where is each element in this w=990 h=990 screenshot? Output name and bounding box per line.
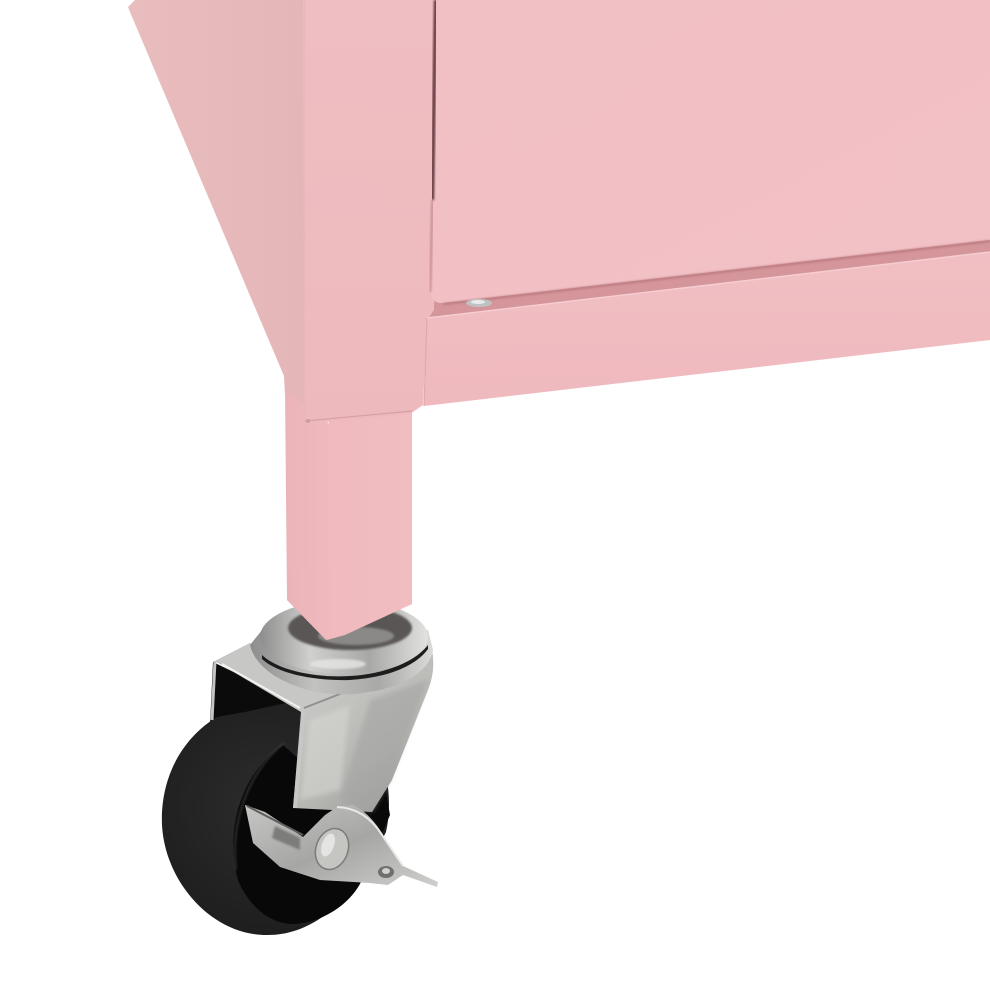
stem socket bbox=[288, 606, 412, 650]
swivel fork body bbox=[215, 643, 433, 812]
brake lever bbox=[245, 805, 438, 887]
leg left face bbox=[285, 390, 331, 640]
brake pin bbox=[378, 866, 394, 878]
leg foot overlay bbox=[327, 570, 412, 640]
wheel tire bbox=[162, 700, 389, 935]
dark gap beside drawer bbox=[430, 0, 436, 292]
wheel hub recess bbox=[233, 745, 390, 924]
bottom rail bbox=[424, 252, 990, 406]
leg bbox=[285, 390, 412, 640]
washer bbox=[260, 600, 428, 674]
fork shading bbox=[340, 680, 428, 812]
brake rivet bbox=[310, 824, 354, 874]
corner post bbox=[303, 0, 440, 424]
caster bbox=[162, 570, 438, 935]
shadow gap above rail bbox=[424, 232, 990, 320]
fork interior bbox=[210, 662, 303, 810]
bearing band bbox=[250, 630, 433, 694]
leg right face bbox=[329, 410, 412, 640]
drawer front bbox=[431, 0, 990, 304]
icon: drawer screw bbox=[466, 299, 492, 307]
side panel bbox=[128, 0, 306, 422]
